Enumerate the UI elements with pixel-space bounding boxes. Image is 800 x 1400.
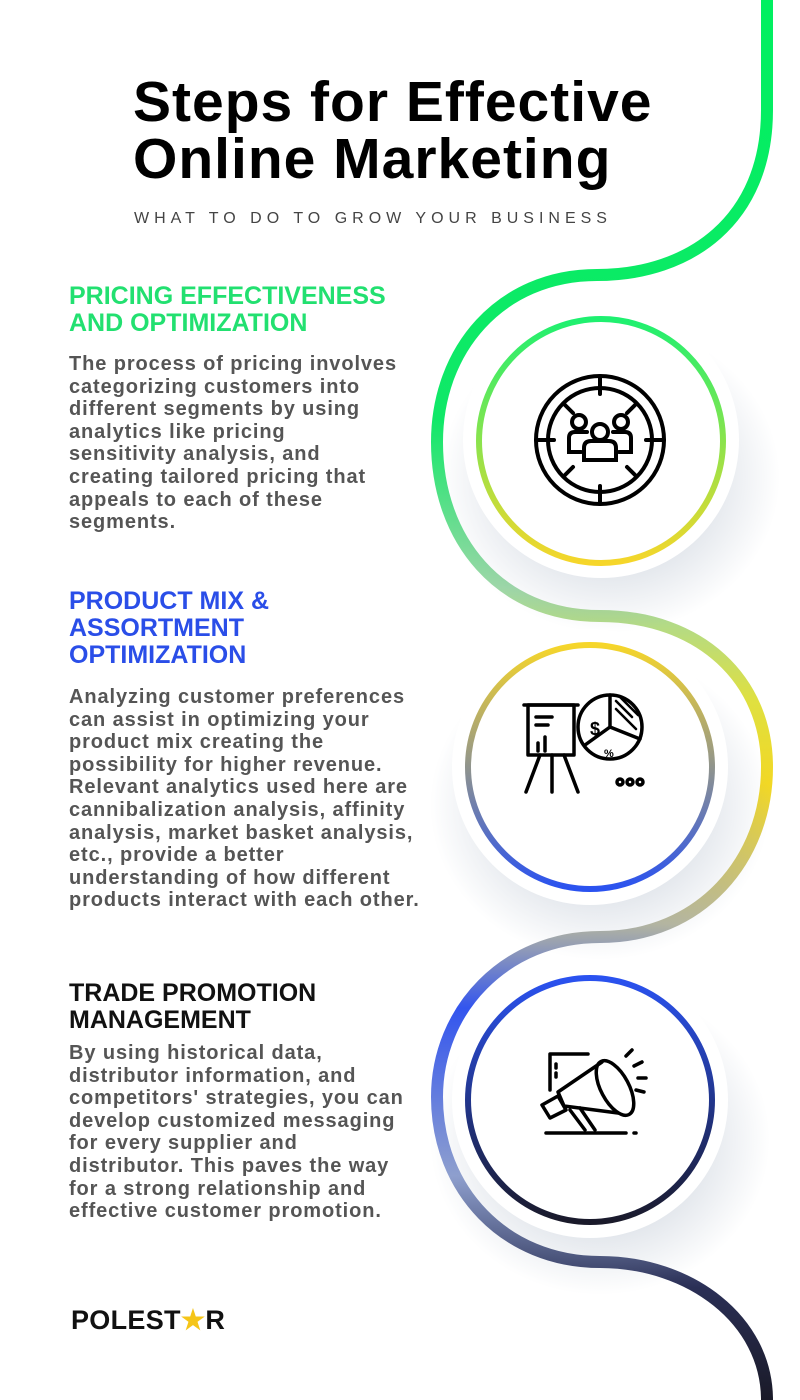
circle 2: product mix icon	[453, 642, 728, 905]
heading: trade promotion: TRADE PROMOTION	[69, 979, 316, 1007]
text: trade promotion: for a strong relationship and	[69, 1178, 366, 1200]
text: pricing: creating tailored pricing that	[69, 466, 366, 488]
heading: pricing: PRICING EFFECTIVENESS	[69, 282, 386, 310]
text: pricing: different segments by using	[69, 398, 360, 420]
text: pricing: sensitivity analysis, and	[69, 443, 320, 465]
heading: trade promotion: MANAGEMENT	[69, 1006, 251, 1034]
icon: presentation chart	[524, 695, 643, 792]
text: pricing: segments.	[69, 511, 176, 533]
text: product mix: Analyzing customer preferences	[69, 686, 405, 708]
heading: product mix: OPTIMIZATION	[69, 641, 246, 669]
text: product mix: possibility for higher revenue.	[69, 754, 383, 776]
text: trade promotion: By using historical data,	[69, 1042, 323, 1064]
text: product mix: analysis, market basket analysis,	[69, 822, 413, 844]
title: Steps for Effective	[133, 70, 652, 134]
heading: product mix	[69, 587, 269, 669]
text: trade promotion: distributor. This paves the way	[69, 1155, 389, 1177]
title	[133, 70, 652, 191]
text: product mix	[69, 686, 420, 911]
circle 1: pricing icon	[464, 316, 739, 578]
heading: pricing	[69, 282, 386, 337]
text: product mix: cannibalization analysis, affinity	[69, 799, 405, 821]
text: product mix: etc., provide a better	[69, 844, 284, 866]
text: pricing: analytics like pricing	[69, 421, 286, 443]
text: product mix: Relevant analytics used here are	[69, 776, 408, 798]
text: trade promotion	[69, 1042, 404, 1222]
circle 3: trade promotion icon	[453, 975, 728, 1238]
text: pricing: appeals to each of these	[69, 489, 323, 511]
text: pricing	[69, 353, 397, 533]
text: product mix: can assist in optimizing your	[69, 709, 370, 731]
logo: POLEST★R	[71, 1305, 225, 1335]
subtitle: WHAT TO DO TO GROW YOUR BUSINESS	[134, 210, 612, 227]
heading: product mix: ASSORTMENT	[69, 614, 244, 642]
text: trade promotion: for every supplier and	[69, 1132, 298, 1154]
text: product mix: products interact with each other.	[69, 889, 420, 911]
text: product mix: understanding of how different	[69, 867, 390, 889]
icon: presentation chart: $	[590, 719, 600, 739]
text: trade promotion: develop customized messaging	[69, 1110, 395, 1132]
heading: pricing: AND OPTIMIZATION	[69, 309, 307, 337]
text: trade promotion: competitors' strategies, you can	[69, 1087, 404, 1109]
text: trade promotion: distributor information, and	[69, 1065, 356, 1087]
icon: target people	[536, 376, 664, 504]
text: trade promotion: effective customer promotion.	[69, 1200, 382, 1222]
text: pricing: The process of pricing involves	[69, 353, 397, 375]
text: product mix: product mix creating the	[69, 731, 324, 753]
heading: product mix: PRODUCT MIX &	[69, 587, 269, 615]
text: pricing: categorizing customers into	[69, 376, 360, 398]
icon: presentation chart: %	[604, 748, 614, 760]
title: Online Marketing	[133, 127, 611, 191]
icon: megaphone	[542, 1050, 646, 1133]
heading: trade promotion	[69, 979, 316, 1034]
